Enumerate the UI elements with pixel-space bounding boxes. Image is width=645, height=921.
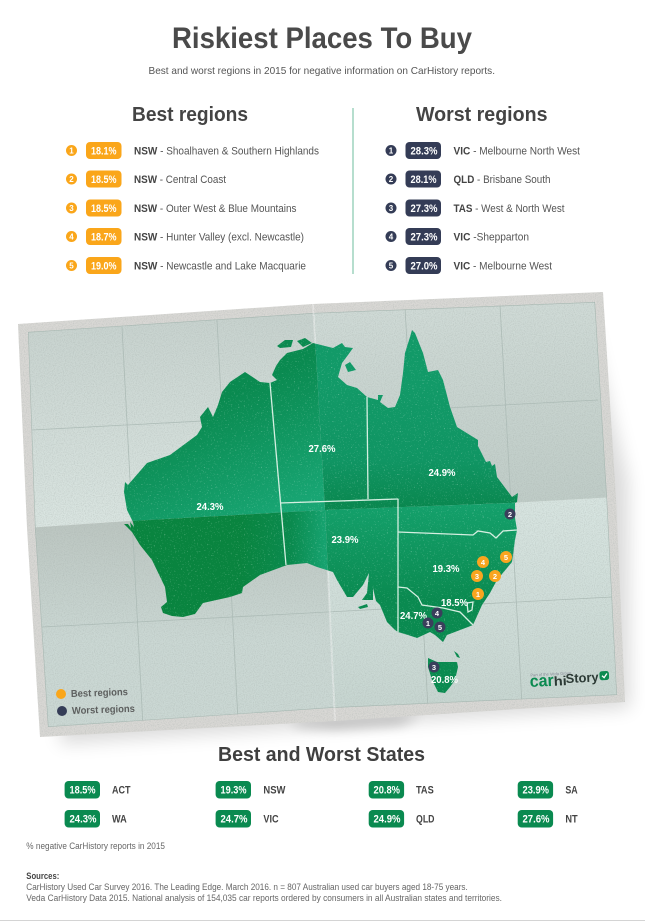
CarHistory logo: car — [529, 671, 555, 691]
state: VIC: VIC — [263, 814, 279, 826]
row: best 2: 18.5% — [91, 174, 117, 186]
CarHistory logo — [529, 668, 610, 691]
CarHistory logo: Story — [565, 669, 600, 686]
state percentages: 20.8% — [431, 674, 459, 686]
row: worst 3: TAS - West & North West — [454, 203, 564, 215]
state: SA: SA — [565, 784, 578, 796]
row: best 1: NSW - Shoalhaven & Southern Highlands — [134, 146, 319, 158]
worst region markers — [422, 508, 516, 672]
row: worst 2: QLD - Brisbane South — [454, 174, 550, 186]
state: TAS — [369, 781, 434, 798]
row: worst 4: 4 — [389, 232, 394, 242]
row: best 2: NSW - Central Coast — [134, 174, 226, 186]
state percentages — [196, 443, 469, 686]
paper surface — [28, 302, 617, 727]
state: NT: 27.6% — [522, 814, 550, 826]
row: best 5: NSW - Newcastle and Lake Macquarie — [134, 260, 306, 272]
best region markers: 4 — [481, 558, 486, 567]
row: worst 5 — [386, 257, 552, 274]
state: NT — [518, 810, 578, 828]
row: best 1 — [66, 142, 319, 159]
state percentages: 24.9% — [428, 467, 456, 479]
state percentages: 24.7% — [400, 610, 428, 622]
best region markers — [471, 551, 512, 600]
state: NSW: NSW — [263, 784, 286, 796]
row: best 3: NSW - Outer West & Blue Mountains — [134, 203, 297, 215]
row: worst 1: 1 — [389, 146, 394, 156]
row: best 2 — [66, 170, 226, 188]
sources — [26, 871, 502, 903]
row: best 4: NSW - Hunter Valley (excl. Newcastle) — [134, 232, 304, 244]
state: SA — [518, 781, 578, 798]
row: worst 2: 2 — [389, 175, 394, 184]
row: worst 4: 27.3% — [410, 232, 438, 244]
worst region markers: 3 — [432, 663, 436, 672]
state: WA — [65, 810, 127, 828]
row: best 3 — [66, 200, 297, 216]
state: QLD: 24.9% — [374, 814, 401, 826]
sources: Veda CarHistory Data 2015. National analysis of 154,035 car reports ordered by consumers in all Australian states and territories. — [26, 893, 502, 903]
panel: folded paper map — [18, 292, 625, 737]
state: ACT: 18.5% — [70, 784, 96, 796]
best region markers: 2 — [493, 572, 497, 581]
state percentages: 23.9% — [332, 534, 359, 546]
row: worst 1 — [386, 142, 580, 159]
state: VIC — [216, 810, 279, 828]
row: worst 2: 28.1% — [410, 174, 437, 186]
row: worst 5: 5 — [389, 262, 394, 270]
row: worst 4: VIC -Shepparton — [454, 232, 529, 244]
row: best 3: 18.5% — [91, 203, 117, 215]
state: TAS: 20.8% — [374, 784, 400, 796]
state percentages: 18.5% — [441, 597, 469, 609]
row: worst 3 — [386, 200, 564, 216]
state: VIC: 24.7% — [220, 814, 248, 826]
state percentages: 24.3% — [196, 501, 224, 513]
worst region markers: 4 — [435, 609, 440, 618]
row: best 4: 18.7% — [91, 232, 117, 244]
best region markers: 5 — [504, 553, 508, 562]
row: best 1: 18.1% — [91, 146, 117, 158]
row: best 4 — [66, 228, 304, 245]
state percentages: 27.6% — [308, 443, 336, 455]
state: QLD: QLD — [416, 814, 435, 826]
row: best 1: 1 — [69, 146, 74, 156]
map legend — [56, 687, 135, 717]
state: NT: NT — [565, 814, 578, 826]
map legend: Worst regions — [72, 704, 135, 717]
state: NSW — [216, 781, 286, 798]
panel: worst regions — [386, 104, 580, 274]
best region markers: 1 — [476, 590, 480, 599]
row: best 5: 5 — [69, 262, 74, 270]
paper grain — [18, 292, 625, 737]
row: worst 5: 27.0% — [410, 260, 438, 272]
row: best 4: 4 — [69, 232, 74, 242]
state: ACT: ACT — [112, 784, 131, 796]
subtitle: Best and worst regions in 2015 for negative information on CarHistory reports. — [148, 65, 495, 77]
heading: worst regions: Worst regions — [416, 104, 548, 126]
crease highlight — [313, 304, 335, 721]
row: worst 3: 27.3% — [410, 203, 438, 215]
row: worst 4 — [386, 228, 529, 245]
heading: best regions: Best regions — [132, 104, 248, 126]
row: worst 3: 3 — [389, 204, 394, 213]
row: best 5: 19.0% — [91, 260, 117, 272]
paper border — [18, 292, 625, 737]
state: TAS: TAS — [416, 784, 434, 796]
row: worst 1: VIC - Melbourne North West — [454, 146, 580, 158]
sources: CarHistory Used Car Survey 2016. The Leading Edge. March 2016. n = 807 Australian used car buyers aged 18-75 years. — [26, 882, 468, 892]
Australia map land — [120, 325, 520, 695]
best region markers: 3 — [475, 572, 479, 581]
heading: best and worst states: Best and Worst States — [218, 744, 425, 766]
row: worst 5: VIC - Melbourne West — [454, 260, 552, 272]
row: worst 2 — [386, 170, 550, 188]
state: WA: 24.3% — [70, 814, 97, 826]
sources: Sources: — [26, 871, 59, 881]
state: NSW: 19.3% — [220, 784, 247, 796]
footnote: % negative CarHistory reports in 2015 — [26, 841, 165, 851]
map legend: Best regions — [71, 687, 128, 700]
row: worst 1: 28.3% — [410, 146, 438, 158]
state: QLD — [369, 810, 435, 828]
title: Riskiest Places To Buy — [172, 22, 472, 55]
worst region markers: 5 — [438, 623, 442, 632]
row: best 2: 2 — [69, 175, 74, 184]
panel: state rankings — [65, 781, 578, 828]
worst region markers: 2 — [508, 510, 512, 519]
row: best 3: 3 — [69, 204, 74, 213]
panel: best regions — [66, 104, 319, 274]
state: SA: 23.9% — [522, 784, 549, 796]
worst region markers: 1 — [426, 619, 430, 628]
state: WA: WA — [112, 814, 127, 826]
CarHistory logo: hi — [553, 673, 567, 689]
state borders — [270, 383, 517, 632]
CarHistory logo: Part of the Veda Group — [530, 670, 572, 677]
row: best 5 — [66, 257, 306, 274]
state: ACT — [65, 781, 131, 798]
state percentages: 19.3% — [432, 563, 460, 575]
map shadow — [60, 325, 630, 744]
